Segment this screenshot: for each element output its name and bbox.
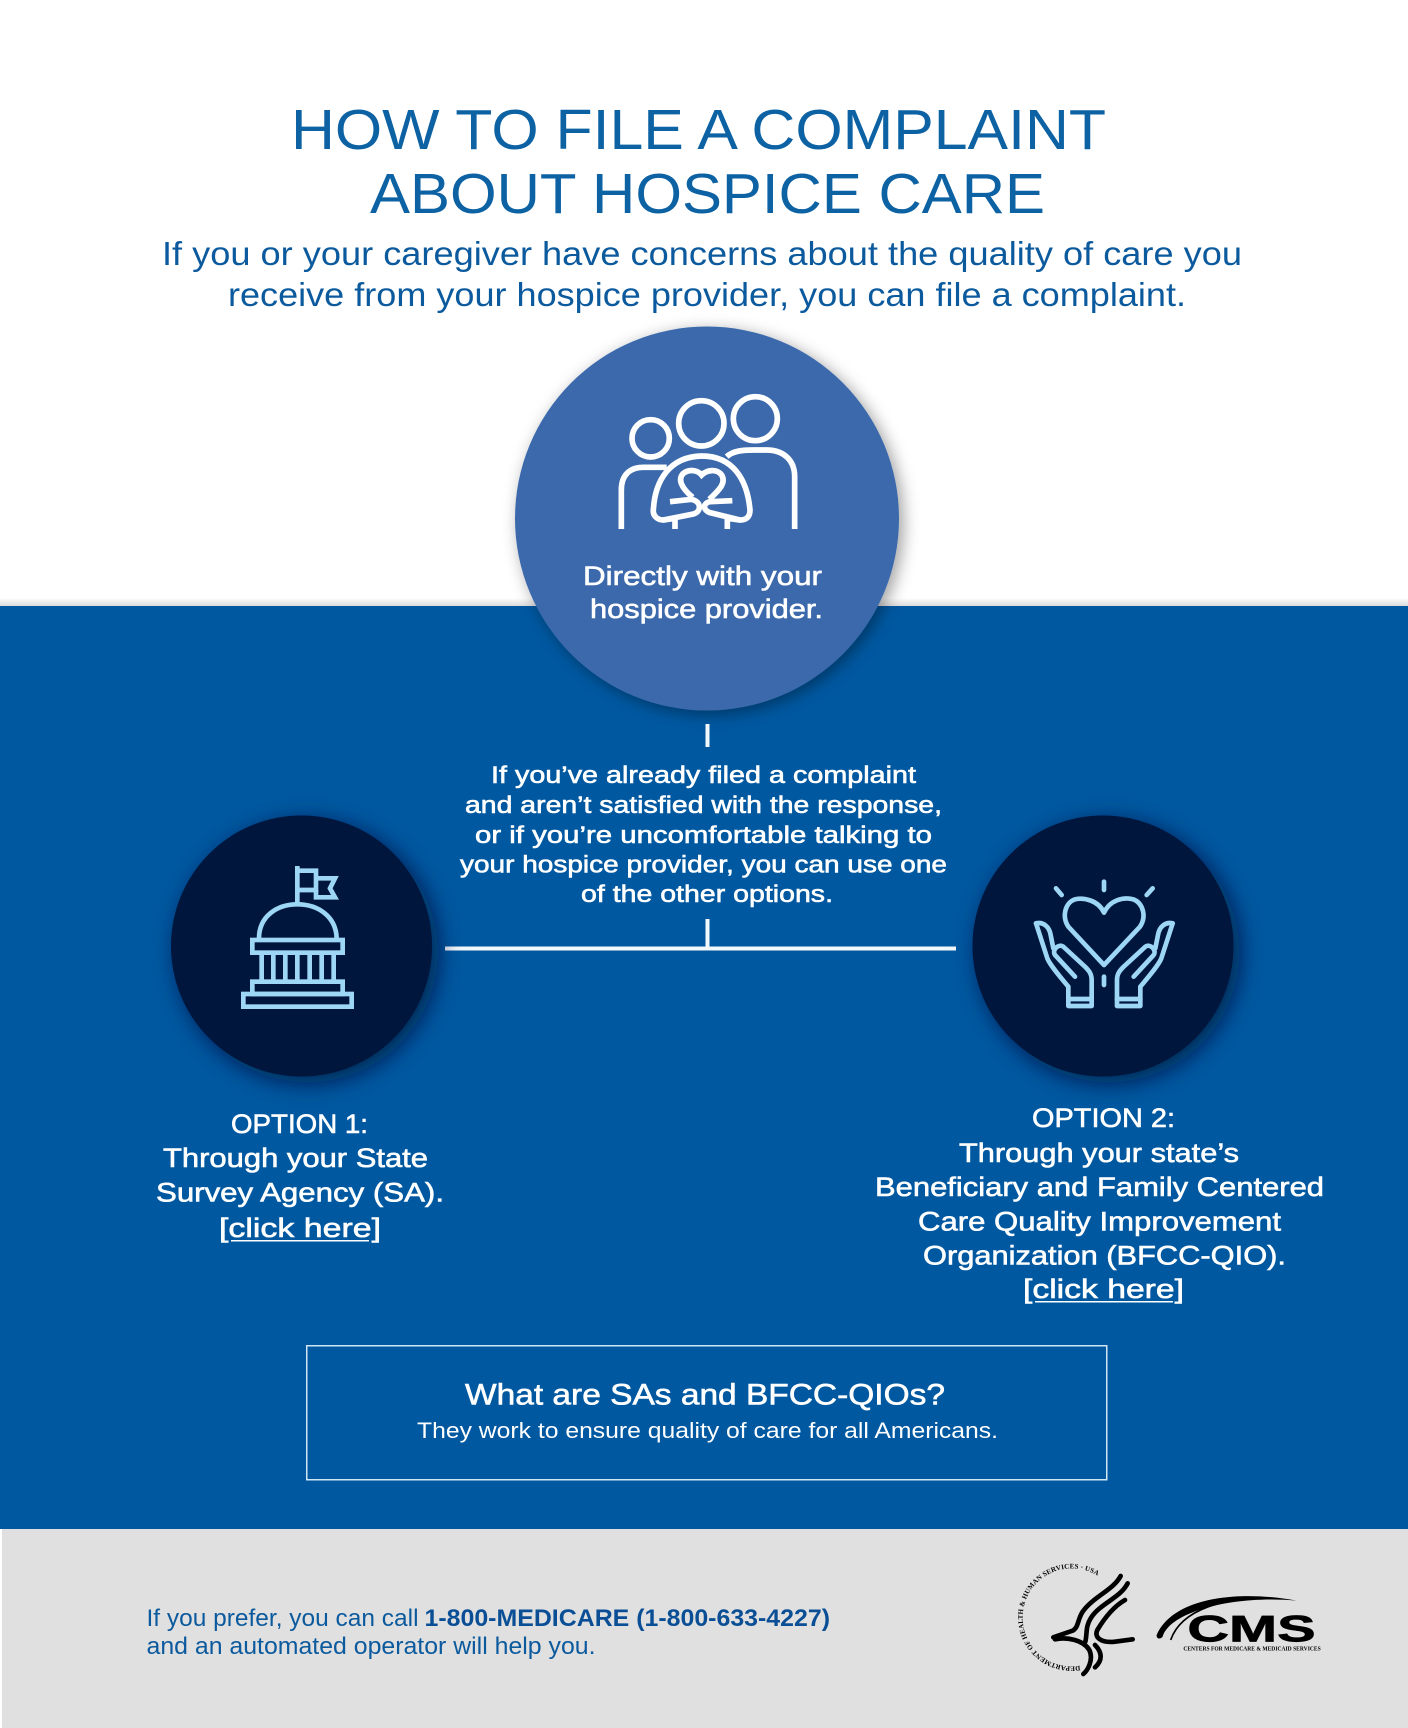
text: phone number note — [146, 1605, 830, 1660]
text: phone number note: and an automated operator will help you. — [146, 1633, 596, 1660]
text: directly with your hospice provider: Directly with your — [583, 561, 822, 591]
callout: what are SAs and BFCC-QIOs — [307, 1346, 1107, 1480]
title — [291, 98, 1106, 226]
intro text — [162, 235, 1242, 313]
text: phone number note: 1-800-MEDICARE (1-800-633-4227) — [424, 1605, 830, 1632]
connector: branch lines — [445, 919, 956, 950]
callout: what are SAs and BFCC-QIOs: What are SAs and BFCC-QIOs? — [465, 1378, 945, 1412]
text: directly with your hospice provider — [583, 561, 823, 624]
logo: HHS seal — [1018, 1564, 1135, 1676]
panel: hospice provider circle — [515, 326, 899, 710]
text: option 1: Survey Agency (SA). — [156, 1178, 444, 1208]
text: other options explanation: of the other options. — [581, 881, 833, 908]
text: option 1: Through your State — [163, 1143, 428, 1173]
panel: option 2 circle — [972, 816, 1234, 1076]
logo: CMS: CMS — [1187, 1608, 1316, 1650]
text: phone number note: If you prefer, you can call — [146, 1605, 418, 1632]
text: other options explanation: If you’ve already filed a complaint — [491, 762, 916, 789]
text: other options explanation: or if you’re uncomfortable talking to — [475, 822, 932, 849]
icon: capitol building — [243, 866, 352, 1007]
logo: CMS: CENTERS FOR MEDICARE & MEDICAID SERVICES — [1183, 1646, 1321, 1652]
callout: what are SAs and BFCC-QIOs: They work to ensure quality of care for all Americans. — [417, 1418, 998, 1443]
text: option 1: [click here] — [219, 1213, 381, 1243]
text: option 2: Organization (BFCC-QIO). — [923, 1240, 1286, 1270]
icon: hands holding heart — [1036, 882, 1173, 1006]
intro text: If you or your caregiver have concerns about the quality of care you — [162, 235, 1242, 272]
panel: blue band — [0, 598, 1408, 1529]
title: ABOUT HOSPICE CARE — [370, 162, 1045, 226]
logo: HHS seal: DEPARTMENT OF HEALTH & HUMAN SERVICES · USA — [1018, 1564, 1098, 1671]
text: option 1 — [156, 1109, 444, 1243]
text: other options explanation: and aren’t satisfied with the response, — [465, 792, 942, 819]
text: other options explanation — [460, 762, 947, 908]
icon: family with heart — [621, 397, 795, 529]
panel: option 1 circle — [171, 816, 432, 1076]
intro text: receive from your hospice provider, you can file a complaint. — [228, 276, 1186, 313]
text: option 2: [click here] — [1023, 1274, 1184, 1304]
text: option 2: Care Quality Improvement — [918, 1206, 1282, 1236]
connector: top tick — [706, 724, 710, 747]
title: HOW TO FILE A COMPLAINT — [291, 98, 1106, 162]
text: option 2: Through your state’s — [959, 1138, 1239, 1168]
text: other options explanation: your hospice provider, you can use one — [460, 852, 947, 878]
text: option 2: Beneficiary and Family Centered — [875, 1172, 1324, 1202]
text: option 1: OPTION 1: — [231, 1109, 368, 1139]
panel: grey footer — [2, 1529, 1408, 1728]
logo: CMS — [1157, 1596, 1321, 1652]
text: option 2: OPTION 2: — [1032, 1103, 1175, 1133]
text: directly with your hospice provider: hospice provider. — [590, 594, 823, 624]
text: option 2 — [875, 1103, 1324, 1304]
